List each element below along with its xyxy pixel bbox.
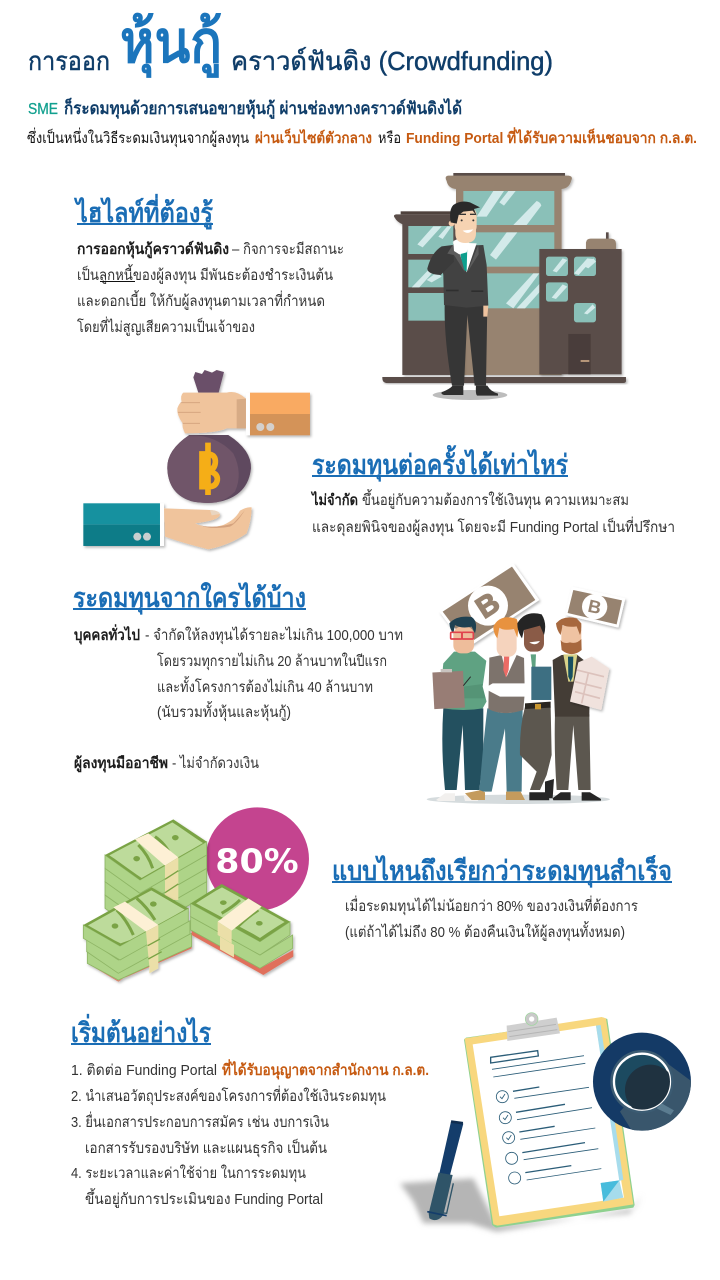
text block: highlights: การออกหุ้นกู้คราวด์ฟันดิง [77, 240, 229, 259]
text block: from whom: - จำกัดให้ลงทุนได้รายละไม่เกิน 100,000 บาท [145, 626, 403, 645]
list: steps: เอกสารรับรองบริษัท และแผนธุรกิจ เป็นต้น [85, 1138, 327, 1158]
list: steps: 1. ติดต่อ Funding Portal [71, 1062, 217, 1079]
ground slab [382, 377, 626, 383]
text block: success: เมื่อระดมทุนได้ไม่น้อยกว่า 80% ของวงเงินที่ต้องการ [345, 895, 638, 916]
badge: 80%: 80% [215, 842, 299, 881]
intro text: หรือ [378, 130, 401, 147]
money stack: left [83, 887, 192, 982]
text block: how much: ขึ้นอยู่กับความต้องการใช้เงินทุน ความเหมาะสม [362, 489, 629, 510]
heading: how to start: เริ่มต้นอย่างไร [71, 1013, 211, 1048]
illustration: clipboard, pen and coffee [400, 1013, 697, 1232]
list: steps: ขึ้นอยู่กับการประเมินของ Funding Portal [85, 1188, 323, 1208]
list: steps [71, 1059, 429, 1208]
text block: highlights [77, 240, 344, 336]
banknote large [439, 563, 539, 648]
text block: success: (แต่ถ้าได้ไม่ถึง 80 % ต้องคืนเงินให้ผู้ลงทุนทั้งหมด) [345, 921, 625, 942]
money stack: right [191, 884, 293, 975]
text block: from whom [74, 624, 403, 773]
investor: afro [517, 613, 562, 800]
receiving hand [83, 503, 252, 549]
illustration: investors with banknotes [427, 563, 625, 804]
title [28, 10, 553, 79]
back building [446, 173, 572, 375]
clipboard shadow [400, 1178, 642, 1232]
baht symbol [202, 443, 217, 495]
text block: from whom: และทั้งโครงการต้องไม่เกิน 40 ล้านบาท [157, 676, 373, 696]
text block: from whom: บุคคลทั่วไป [74, 624, 140, 645]
businessman [427, 201, 507, 400]
list: steps: 2. นำเสนอวัตถุประสงค์ของโครงการที่ต้องใช้เงินระดมทุน [71, 1085, 386, 1106]
investor: glasses [432, 617, 488, 801]
banknote small: B [586, 596, 603, 618]
text block: highlights: เป็นลูกหนี้ของผู้ลงทุน มีพันธะต้องชำระเงินต้น [77, 264, 333, 285]
heading: success: แบบไหนถึงเรียกว่าระดมทุนสำเร็จ [332, 853, 672, 888]
list: steps: ที่ได้รับอนุญาตจากสำนักงาน ก.ล.ต. [222, 1059, 429, 1080]
investor: beard [553, 617, 609, 801]
clipboard [464, 1013, 635, 1228]
money stack: back [105, 819, 207, 933]
heading: from whom: ระดมทุนจากใครได้บ้าง [73, 582, 306, 615]
text block: success [345, 895, 638, 942]
text block: from whom: ผู้ลงทุนมืออาชีพ [74, 755, 168, 773]
banknote small [565, 587, 625, 628]
text block: from whom: โดยรวมทุกรายไม่เกิน 20 ล้านบาทในปีแรก [157, 652, 387, 671]
money bag [167, 370, 251, 503]
illustration: hands and money bag [83, 370, 310, 549]
intro text: Funding Portal ที่ได้รับความเห็นชอบจาก ก.ล.ต. [406, 127, 697, 147]
text block: highlights: และดอกเบี้ย ให้กับผู้ลงทุนตามเวลาที่กำหนด [77, 290, 325, 311]
giving hand [177, 392, 310, 435]
intro text: ผ่านเว็บไซต์ตัวกลาง [255, 128, 372, 147]
heading: how much: ระดมทุนต่อครั้งได้เท่าไหร่ [312, 444, 568, 482]
text block: from whom: - ไม่จำกัดวงเงิน [172, 754, 259, 772]
text block: how much: ไม่จำกัด [310, 490, 358, 509]
title: หุ้นกู้ [120, 10, 222, 79]
list: steps: 4. ระยะเวลาและค่าใช้จ่าย ในการระดมทุน [71, 1164, 306, 1183]
heading: highlights: ไฮไลท์ที่ต้องรู้ [73, 193, 213, 230]
intro text: ก็ระดมทุนด้วยการเสนอขายหุ้นกู้ ผ่านช่องทางคราวด์ฟันดิงได้ [64, 96, 462, 120]
text block: highlights: – กิจการจะมีสถานะ [232, 241, 344, 258]
coffee cup [592, 1032, 691, 1131]
intro text [27, 96, 697, 148]
intro text: SME [28, 101, 58, 118]
list: steps: 3. ยื่นเอกสารประกอบการสมัคร เช่น งบการเงิน [71, 1111, 329, 1131]
title: การออก [28, 46, 110, 76]
text block: how much: และดุลยพินิจของผู้ลงทุน โดยจะมี Funding Portal เป็นที่ปรึกษา [312, 516, 675, 537]
text block: how much [310, 489, 675, 537]
left building [394, 211, 463, 375]
title: คราวด์ฟันดิง (Crowdfunding) [231, 46, 553, 76]
illustration: stacks of money with 80% badge [83, 807, 309, 982]
text block: from whom: (นับรวมทั้งหุ้นและหุ้นกู้) [157, 701, 291, 722]
investor: redhead [465, 617, 533, 800]
pen [427, 1120, 463, 1220]
right building [539, 232, 622, 374]
badge: 80% [206, 807, 309, 911]
intro text: ซึ่งเป็นหนึ่งในวิธีระดมเงินทุนจากผู้ลงทุน [27, 127, 249, 148]
text block: highlights: โดยที่ไม่สูญเสียความเป็นเจ้าของ [77, 316, 255, 336]
banknote large: B [470, 586, 506, 625]
illustration: businessman and buildings [382, 173, 626, 400]
